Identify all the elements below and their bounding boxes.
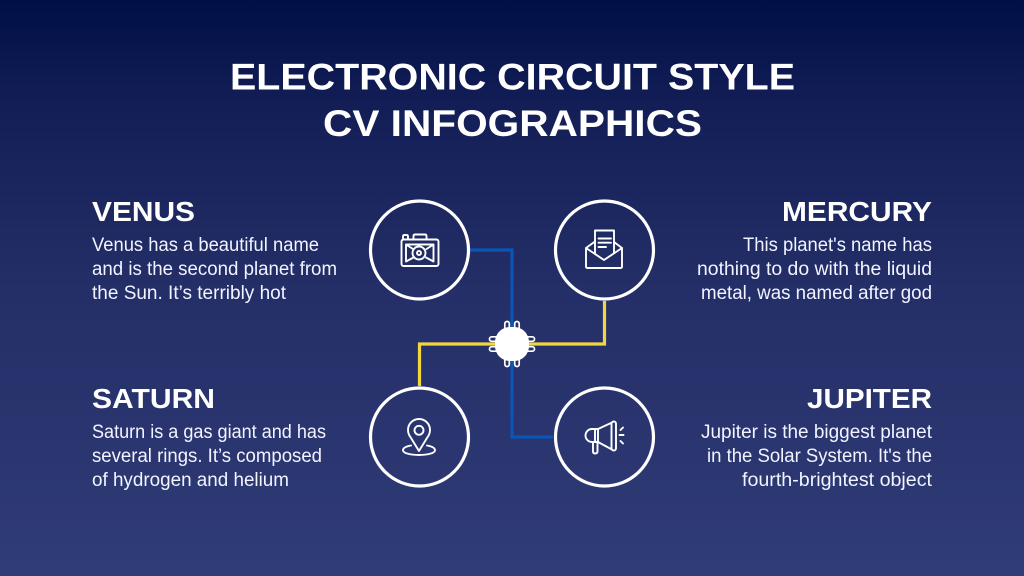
icon: envelope in circle: [556, 201, 654, 299]
heading: jupiter: JUPITER: [807, 383, 932, 414]
icon: map pin in circle: [370, 388, 468, 486]
title: [230, 57, 795, 144]
title: ELECTRONIC CIRCUIT STYLE: [230, 57, 795, 98]
text block: saturn: Saturn is a gas giant and has: [92, 422, 326, 443]
icon: camera in circle: [370, 201, 468, 299]
icon: central chip: [490, 322, 534, 366]
panel: saturn: [92, 383, 326, 491]
panel: mercury: [697, 196, 932, 304]
text block: saturn: of hydrogen and helium: [92, 470, 289, 491]
text block: jupiter: in the Solar System. It's the: [707, 446, 932, 467]
circuit trace: blue: [470, 250, 553, 437]
text block: saturn: several rings. It’s composed: [92, 446, 322, 467]
text block: mercury: nothing to do with the liquid: [697, 259, 932, 280]
text block: saturn: [92, 422, 326, 491]
text block: venus: [92, 235, 337, 304]
text block: mercury: [697, 235, 932, 304]
heading: venus: VENUS: [92, 196, 195, 227]
heading: saturn: SATURN: [92, 383, 215, 414]
text block: jupiter: fourth-brightest object: [742, 470, 933, 491]
text block: jupiter: [701, 422, 933, 491]
circuit trace: yellow: [420, 301, 604, 386]
text block: mercury: metal, was named after god: [701, 283, 932, 304]
panel: venus: [92, 196, 337, 304]
panel: jupiter: [701, 383, 933, 491]
text block: jupiter: Jupiter is the biggest planet: [701, 422, 933, 443]
heading: mercury: MERCURY: [782, 196, 932, 227]
icon: megaphone in circle: [556, 388, 654, 486]
text block: venus: the Sun. It’s terribly hot: [92, 283, 287, 304]
title: CV INFOGRAPHICS: [323, 103, 702, 144]
text block: mercury: This planet's name has: [743, 235, 932, 256]
text block: venus: Venus has a beautiful name: [92, 235, 319, 256]
text block: venus: and is the second planet from: [92, 259, 337, 280]
